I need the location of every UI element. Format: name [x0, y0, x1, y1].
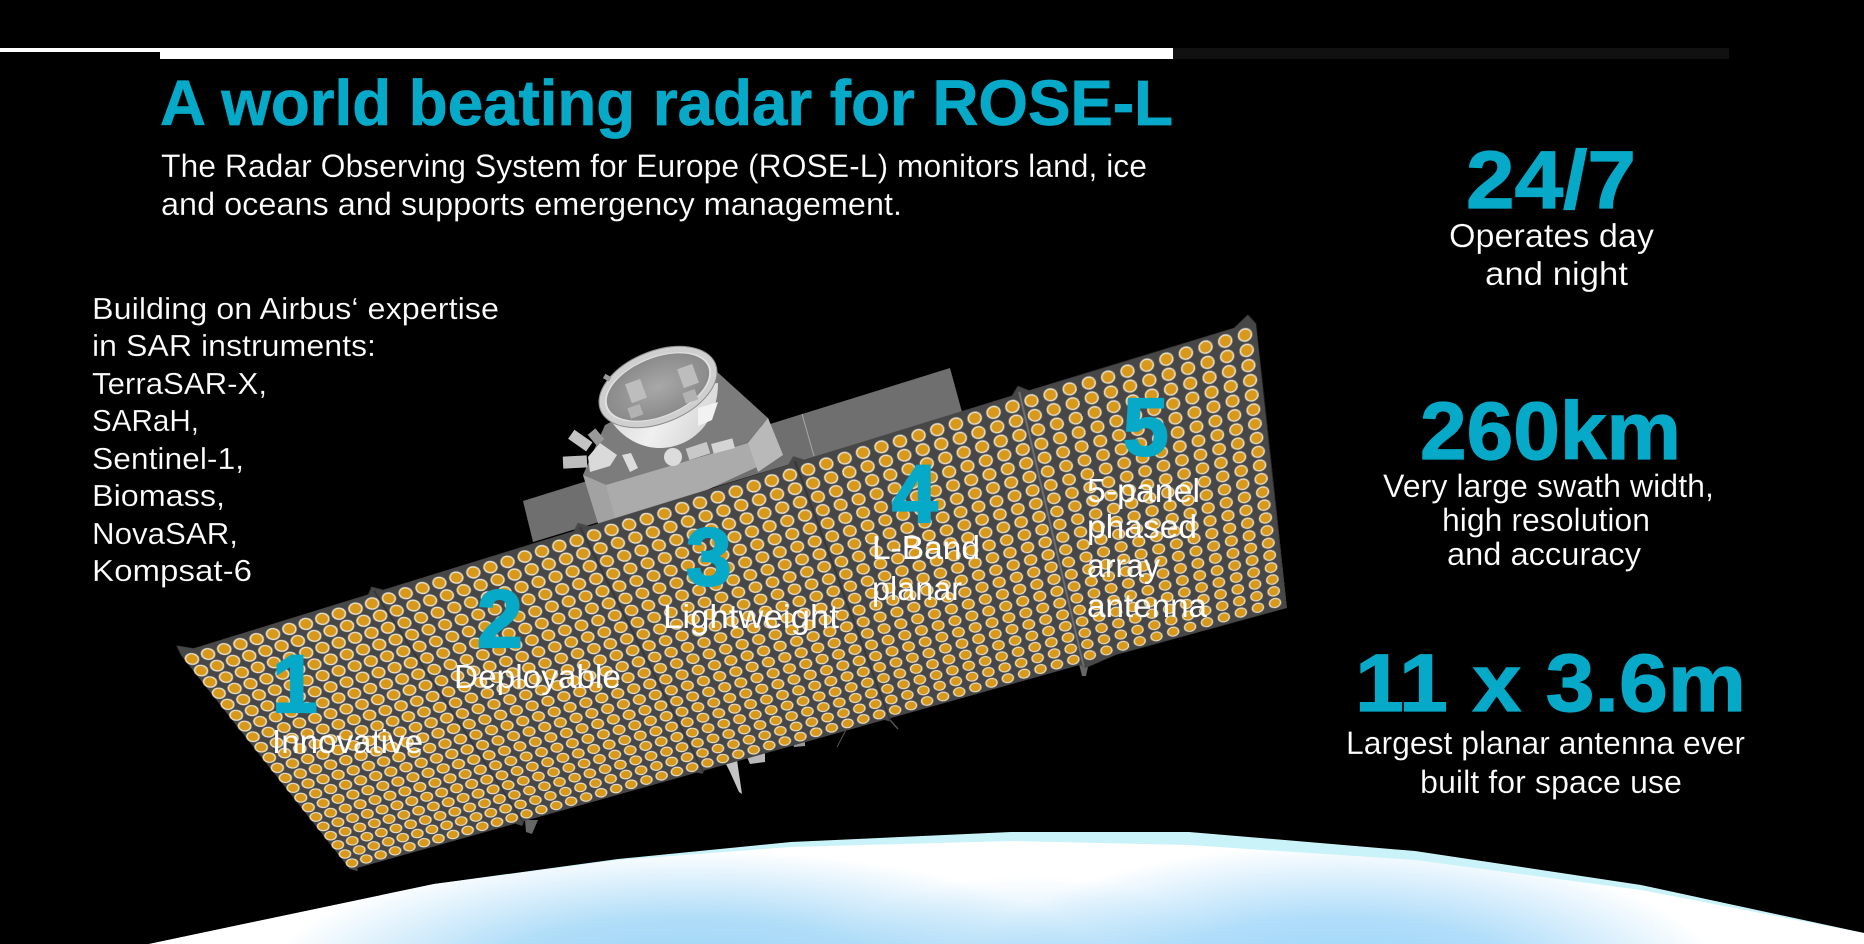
stat: 11 x 3.6m: 11 x 3.6m — [1355, 638, 1746, 729]
feature 5: array — [1087, 547, 1160, 584]
feature 3: 3 — [686, 512, 732, 603]
heritage list — [92, 291, 499, 588]
feature 3: Lightweight — [663, 598, 839, 635]
stat: 260km — [1383, 386, 1714, 572]
heritage list: Building on Airbus‘ expertise — [92, 291, 499, 326]
stat: 260km: 260km — [1420, 386, 1681, 477]
feature 5: 5-panel — [1087, 472, 1200, 509]
header bars — [0, 48, 1729, 59]
title: A world beating radar for ROSE-L — [160, 67, 1173, 139]
feature 2: 2 — [477, 574, 523, 665]
feature 2 — [454, 574, 621, 695]
feature 1 — [272, 639, 423, 760]
stat: 260km: Very large swath width, — [1383, 468, 1714, 504]
radar dome — [587, 330, 729, 448]
intro text: The Radar Observing System for Europe (ROSE-L) monitors land, ice — [161, 148, 1147, 184]
panel hinge lines — [374, 392, 1084, 823]
stat: 24/7: Operates day — [1449, 217, 1655, 254]
stat: 24/7: 24/7 — [1466, 135, 1636, 226]
feature 5: 5 — [1123, 382, 1169, 473]
stat: 11 x 3.6m: Largest planar antenna ever — [1346, 725, 1745, 761]
intro text — [161, 148, 1147, 222]
feature 1: Innovative — [272, 723, 423, 760]
intro text: and oceans and supports emergency management. — [161, 186, 902, 222]
body front face — [583, 418, 783, 530]
antenna hinge brackets and spike — [525, 820, 538, 834]
feature 4: L-Band — [872, 529, 980, 566]
antenna dot grid — [179, 324, 1284, 869]
heritage list: in SAR instruments: — [92, 328, 376, 363]
phased array antenna panels — [176, 314, 1287, 872]
earth horizon — [149, 832, 1864, 944]
stat: 11 x 3.6m — [1346, 638, 1746, 800]
feature 5 — [1087, 382, 1208, 624]
stat: 260km: high resolution — [1442, 502, 1650, 538]
feature 3 — [663, 512, 839, 635]
heritage list: SARaH, — [92, 403, 199, 438]
thrusters and equipment boxes — [563, 428, 735, 472]
body top — [583, 370, 768, 486]
stat: 11 x 3.6m: built for space use — [1420, 764, 1682, 800]
feature 2: Deployable — [454, 658, 621, 695]
heritage list: TerraSAR-X, — [92, 366, 267, 401]
heritage list: Kompsat-6 — [92, 553, 252, 588]
feature 5: antenna — [1087, 587, 1208, 624]
heritage list: Biomass, — [92, 478, 225, 513]
satellite bus — [523, 330, 1090, 834]
back plate — [523, 368, 962, 542]
antenna frame — [174, 311, 1287, 873]
feature 4: planar — [872, 570, 962, 607]
feature 4: 4 — [892, 449, 938, 540]
stat: 24/7: and night — [1485, 255, 1628, 292]
heritage list: Sentinel-1, — [92, 441, 244, 476]
feature 4 — [872, 449, 980, 607]
heritage list: NovaSAR, — [92, 516, 238, 551]
stat: 24/7 — [1449, 135, 1655, 292]
stat: 260km: and accuracy — [1447, 536, 1641, 572]
feature 1: 1 — [272, 639, 318, 730]
feature 5: phased — [1087, 508, 1197, 545]
